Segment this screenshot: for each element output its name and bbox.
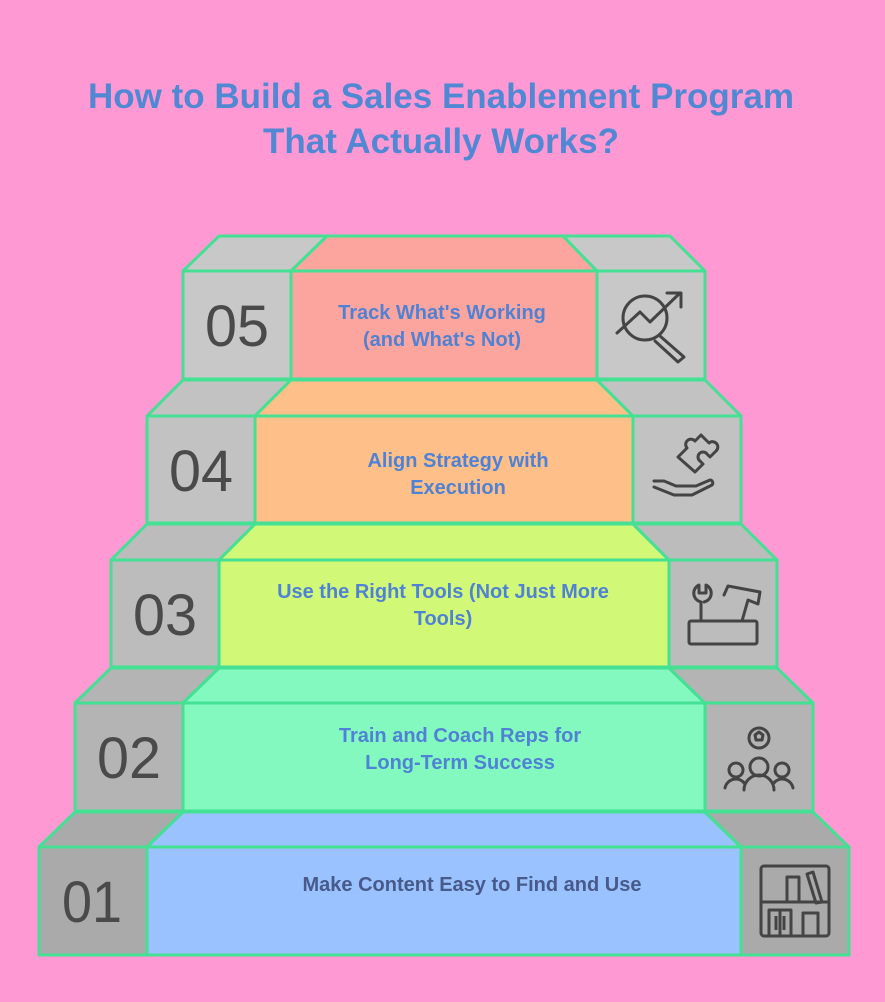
icon: bookshelf	[761, 866, 829, 936]
number 04: 04	[169, 439, 233, 504]
label 05	[338, 302, 546, 351]
number 02: 02	[97, 726, 161, 791]
label 02: Train and Coach Reps for	[339, 725, 581, 747]
label 05: (and What's Not)	[363, 329, 521, 351]
title: How to Build a Sales Enablement Program	[88, 77, 794, 116]
icon: team with ball	[725, 728, 793, 790]
label 04	[367, 450, 549, 499]
label 03: Use the Right Tools (Not Just More	[277, 581, 609, 603]
label 02	[339, 725, 581, 774]
icon: hand with puzzle	[654, 435, 718, 495]
title: That Actually Works?	[263, 122, 619, 161]
step 01	[39, 812, 849, 955]
number 05: 05	[205, 294, 269, 359]
label 05: Track What's Working	[338, 302, 546, 324]
icon: toolbox	[689, 585, 760, 644]
number 01: 01	[62, 870, 122, 935]
label 01: Make Content Easy to Find and Use	[303, 874, 641, 896]
step 04	[147, 380, 741, 523]
step 02	[75, 668, 813, 811]
label 04: Execution	[410, 477, 506, 499]
label 03: Tools)	[414, 608, 472, 630]
title	[88, 77, 794, 161]
number 03: 03	[133, 583, 197, 648]
step 03	[111, 524, 777, 667]
label 03	[277, 581, 609, 630]
label 02: Long-Term Success	[365, 752, 555, 774]
icon: analytics magnifier	[617, 293, 684, 362]
label 04: Align Strategy with	[367, 450, 549, 472]
step 05	[183, 236, 705, 379]
